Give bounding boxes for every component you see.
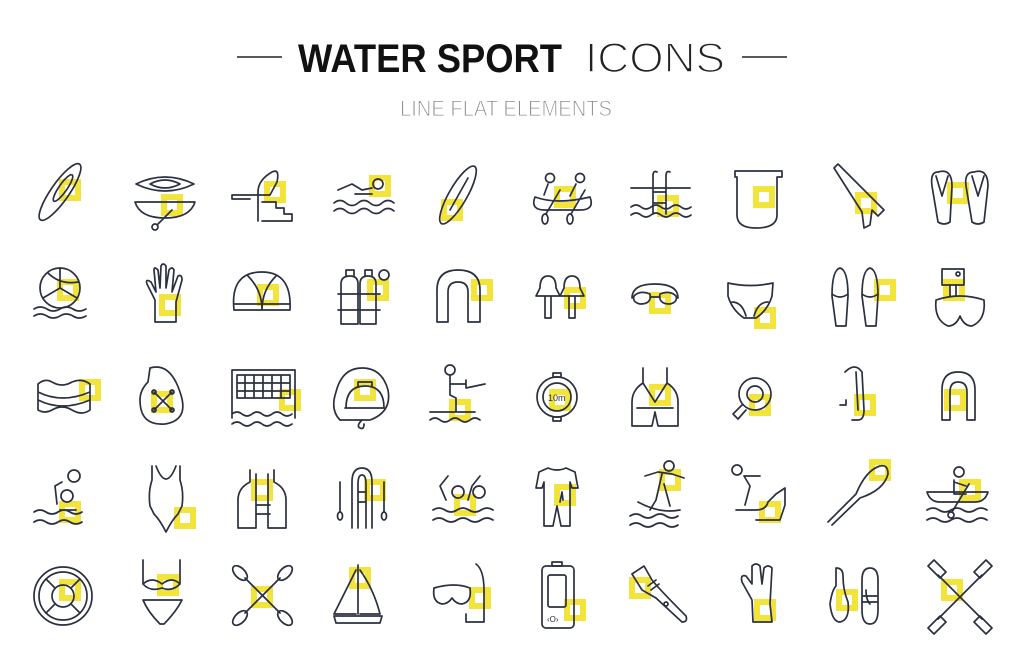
icon: kayak bbox=[33, 159, 87, 225]
icon: jet ski rider bbox=[732, 465, 785, 520]
icon: lifebuoy with rope bbox=[733, 378, 771, 419]
icon: bikini bbox=[143, 560, 182, 624]
icon: volleyball bbox=[34, 268, 86, 318]
icon: wetsuit bbox=[536, 468, 578, 526]
icon: fins bbox=[832, 268, 893, 326]
icon: life vest bbox=[632, 368, 678, 426]
title: WATER SPORT bbox=[298, 37, 562, 81]
icon: ear plugs bbox=[536, 276, 584, 318]
icon: scuba tanks bbox=[338, 270, 389, 324]
icon: wakeboarder bbox=[430, 365, 485, 422]
icon: water polo goal bbox=[232, 370, 298, 426]
icon: canoe bbox=[135, 177, 195, 230]
icon: body board bbox=[140, 367, 183, 424]
icon: synchronized swimmers bbox=[433, 476, 493, 522]
icon: surfer bbox=[630, 461, 684, 527]
icon: goggles bbox=[632, 284, 678, 311]
icon: dive computer: ‹O› bbox=[547, 615, 559, 624]
subtitle: LINE FLAT ELEMENTS bbox=[400, 96, 612, 121]
icon: flashlight bbox=[632, 566, 686, 622]
icon: dive mask with snorkel bbox=[434, 564, 488, 622]
icon: glove bbox=[146, 264, 182, 322]
icon: snorkel bbox=[840, 367, 873, 420]
icon: swim briefs bbox=[728, 283, 773, 326]
icon: flip flops bbox=[932, 171, 988, 224]
icon: depth gauge: 10m bbox=[548, 393, 566, 403]
icon: kickboard bbox=[735, 171, 782, 228]
icon: speargun bbox=[834, 164, 884, 228]
icon: rope and carabiner bbox=[830, 568, 878, 624]
icon: inflatable boat bbox=[338, 468, 386, 528]
icon: rafting bbox=[534, 174, 591, 224]
icon: surfboard bbox=[434, 162, 482, 228]
icon: sailboat bbox=[334, 565, 382, 623]
icon: dive glove bbox=[742, 564, 773, 622]
icon: pool noodle bbox=[38, 380, 98, 413]
icon: buoyancy collar bbox=[942, 372, 975, 420]
icon: buoy bbox=[334, 368, 389, 428]
title bbox=[237, 34, 787, 81]
icon: depth gauge bbox=[537, 373, 577, 421]
icon: camera mask bbox=[936, 269, 984, 326]
icon: swimsuit bbox=[149, 466, 193, 532]
icon: rowing bbox=[927, 467, 988, 522]
icon: swimmer bbox=[334, 178, 394, 214]
icon: diving platform bbox=[232, 171, 292, 221]
icon: life jacket bbox=[238, 470, 286, 528]
icon: dive computer bbox=[542, 562, 583, 628]
icon: crossed paddles bbox=[230, 563, 295, 628]
title: ICONS bbox=[585, 34, 725, 81]
icon: water polo player bbox=[34, 470, 82, 524]
icon: paddle bbox=[828, 462, 888, 525]
icon: lifebuoy bbox=[34, 567, 92, 625]
icon: pool ladder bbox=[631, 172, 691, 217]
icon: crossed oars bbox=[928, 560, 992, 634]
icon: swim cap bbox=[234, 272, 290, 310]
icon: float back bbox=[437, 270, 490, 322]
